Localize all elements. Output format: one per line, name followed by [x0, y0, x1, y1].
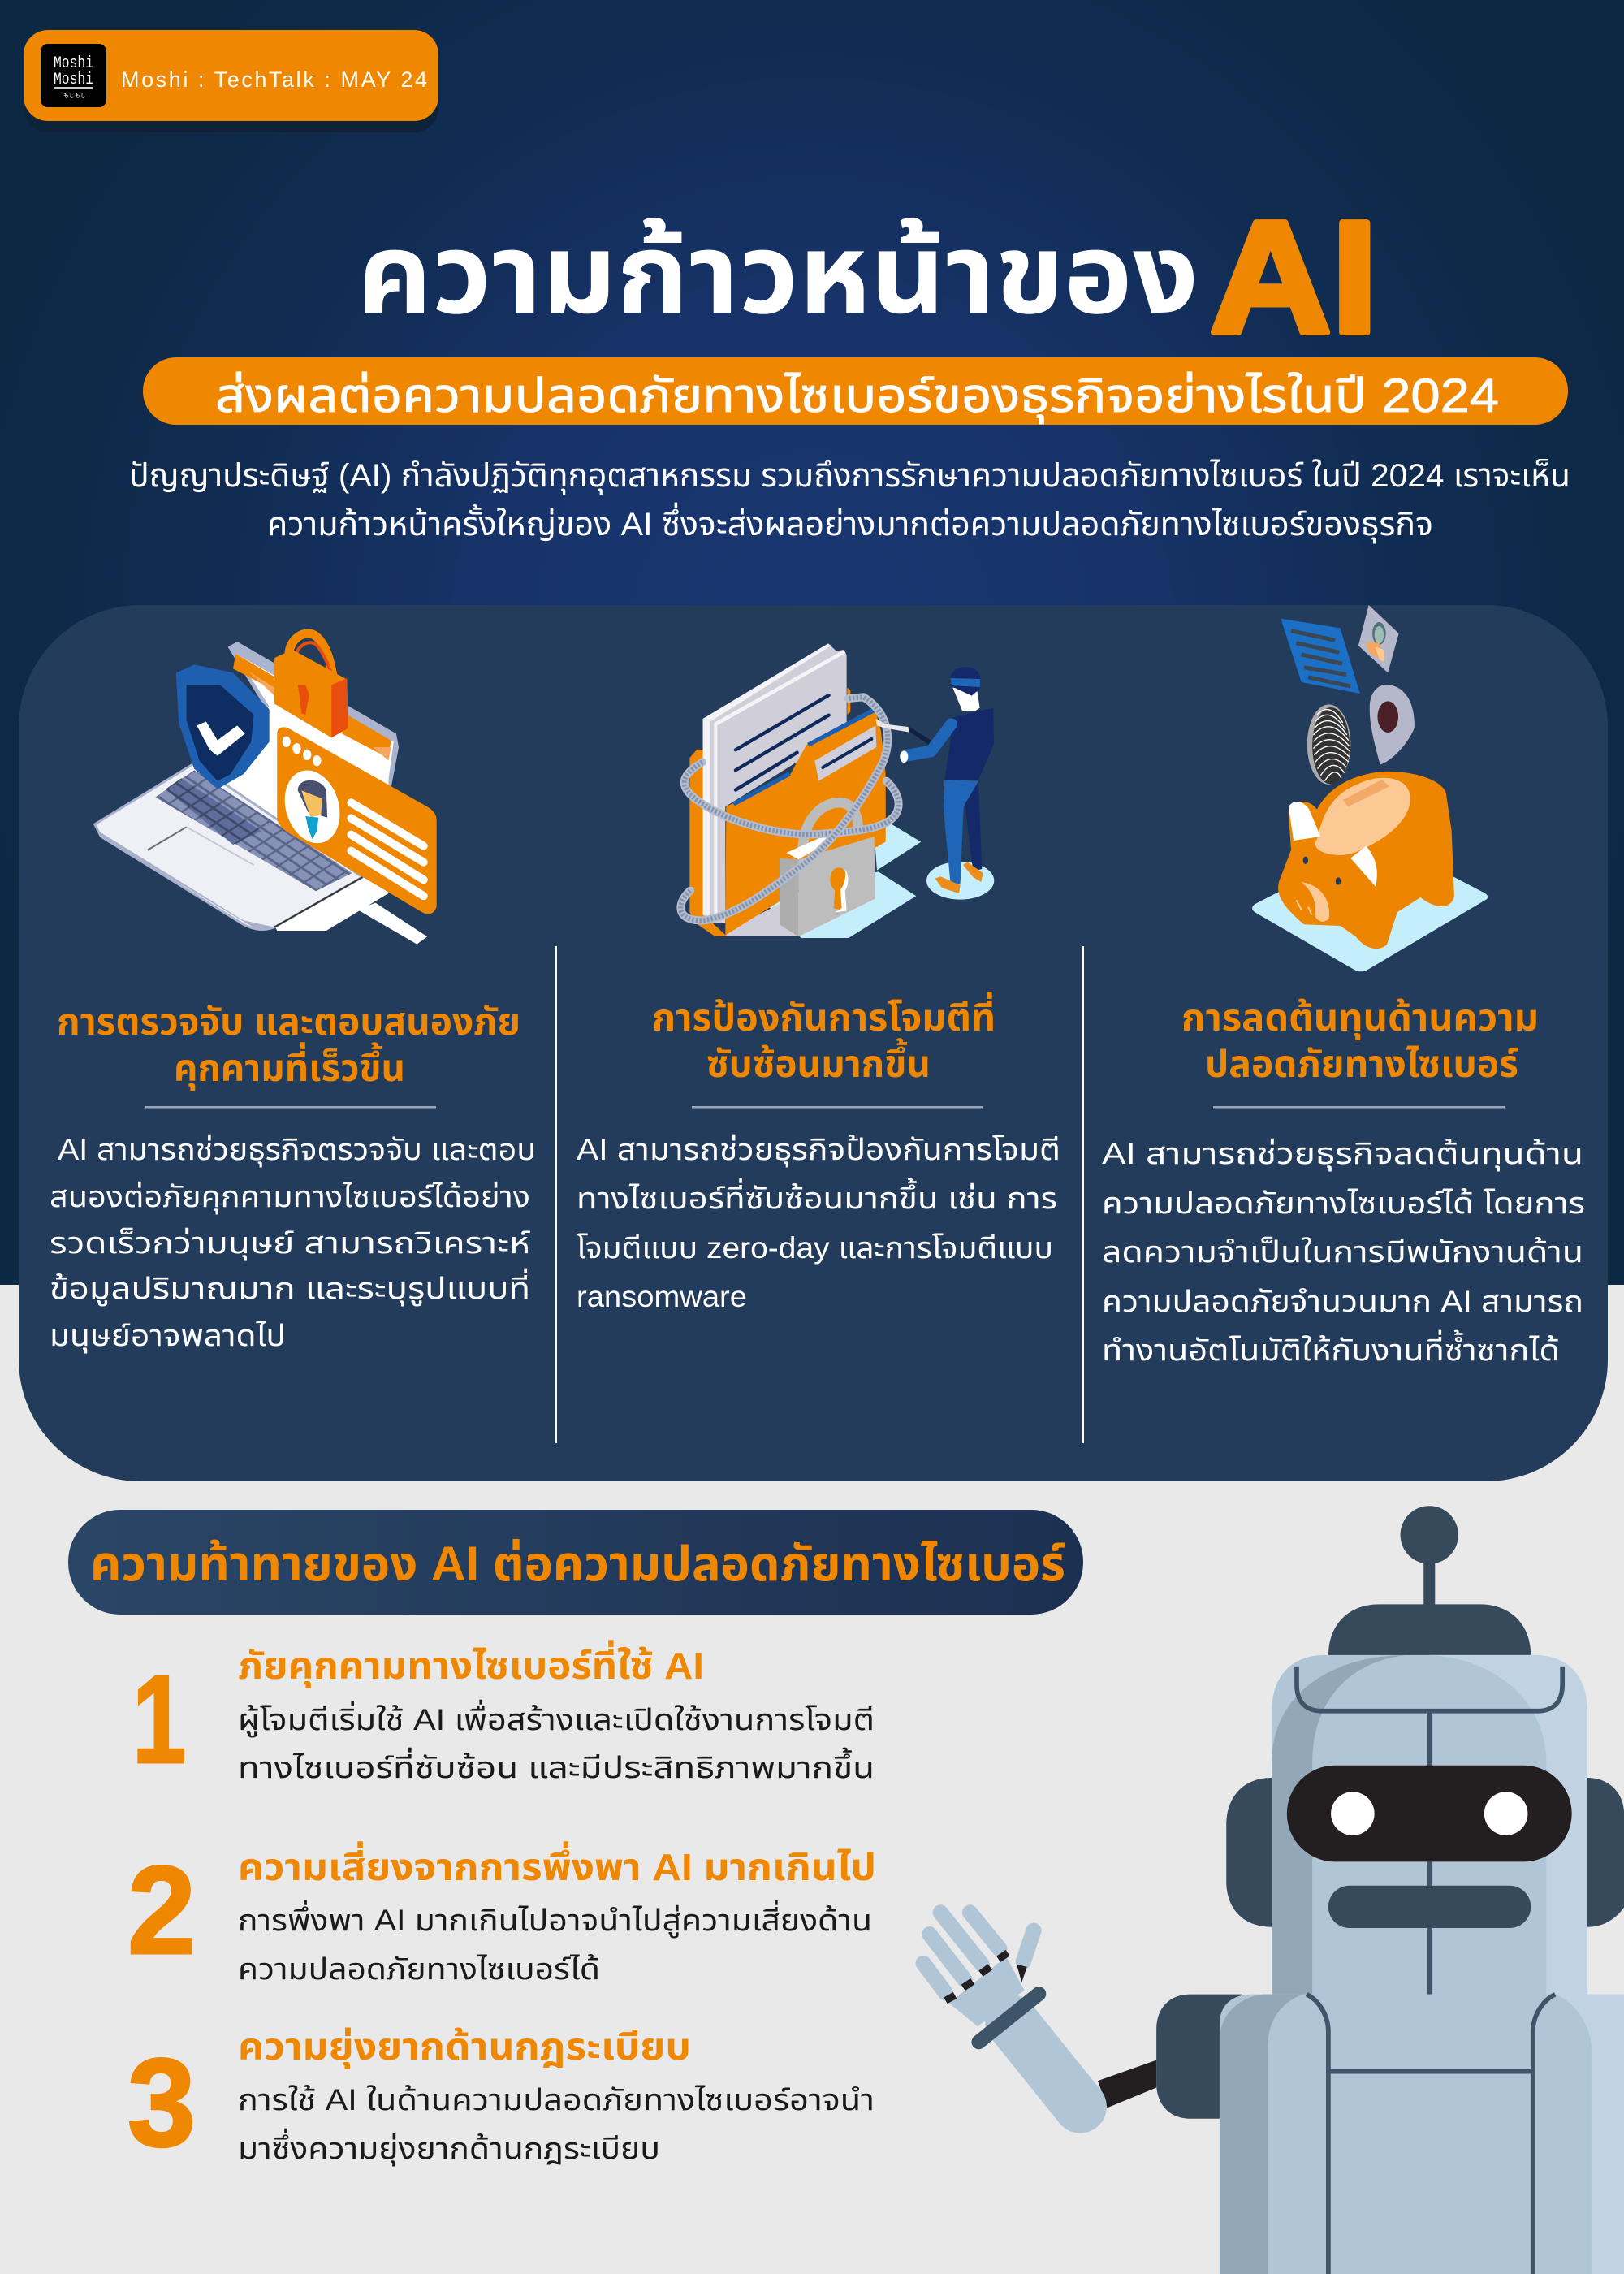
- column 3 body: ทำงานอัตโนมัติให้กับงานที่ซ้ำซากได้: [1102, 1329, 1560, 1367]
- column 3 heading: การลดต้นทุนด้านความ: [1181, 996, 1539, 1040]
- challenge 3 text: [238, 2083, 875, 2167]
- fingerprint: [1307, 704, 1350, 785]
- column 3 heading: ปลอดภัยทางไซเบอร์: [1205, 1043, 1518, 1085]
- number 1: 1: [132, 1649, 186, 1789]
- column 1: detection and response: [50, 1001, 536, 1354]
- column 2 heading: ซับซ้อนมากขึ้น: [706, 1038, 931, 1085]
- column 2 heading: [652, 992, 996, 1085]
- panel: three benefits: [19, 605, 1608, 1481]
- location pin: [1370, 685, 1415, 765]
- column 1 body: ข้อมูลปริมาณมาก และระบุรูปแบบที่: [50, 1268, 530, 1307]
- column 2 body: [577, 1133, 1060, 1313]
- column 2 body: ทางไซเบอร์ที่ซับซ้อนมากขึ้น เช่น การ: [577, 1178, 1057, 1215]
- subtitle pill: [143, 357, 1568, 425]
- badge text: Moshi : TechTalk : MAY 24: [121, 67, 427, 92]
- challenge 3 text: การใช้ AI ในด้านความปลอดภัยทางไซเบอร์อาจนำ: [238, 2083, 875, 2116]
- column 1 body: AI สามารถช่วยธุรกิจตรวจจับ และตอบ: [58, 1133, 536, 1168]
- column 3 body: [1102, 1137, 1585, 1367]
- papers: [703, 643, 847, 923]
- ID photo: [1358, 605, 1399, 672]
- robot head: [1272, 1655, 1587, 1995]
- column 3: reducing cost: [1102, 996, 1585, 1367]
- illustration: locked folder and hacker: [680, 643, 994, 938]
- column 1 heading: คุกคามที่เร็วขึ้น: [174, 1042, 405, 1091]
- column 2 heading: การป้องกันการโจมตีที่: [652, 992, 996, 1039]
- challenge 1 text: [238, 1699, 875, 1784]
- icon: Moshi Moshi logo: Moshi: [54, 71, 93, 89]
- icon: Moshi Moshi logo: [41, 44, 106, 107]
- column 1 heading: การตรวจจับ และตอบสนองภัย: [57, 1001, 520, 1043]
- challenge 2 text: [238, 1900, 872, 1986]
- title: AI: [1210, 188, 1378, 366]
- chain: [680, 697, 899, 920]
- robot body: [1220, 1995, 1624, 2274]
- title: [357, 188, 1378, 366]
- column 3 body: ความปลอดภัยทางไซเบอร์ได้ โดยการ: [1102, 1187, 1585, 1220]
- column 1 body: สนองต่อภัยคุกคามทางไซเบอร์ได้อย่าง: [50, 1180, 530, 1215]
- padlock: [802, 802, 858, 855]
- keyboard keys: [155, 770, 352, 891]
- robot forearm and hand: [923, 1913, 1080, 2107]
- challenge 1 text: ผู้โจมตีเริ่มใช้ AI เพื่อสร้างและเปิดใช้งานการโจมตี: [238, 1699, 875, 1738]
- column 1 heading: [57, 1001, 520, 1091]
- challenge 3 heading: ความยุ่งยากด้านกฎระเบียบ: [238, 2025, 691, 2069]
- illustration: piggy bank with personal data: [1252, 605, 1488, 971]
- ID card: [277, 727, 437, 914]
- column 1 body: รวดเร็วกว่ามนุษย์ สามารถวิเคราะห์: [50, 1226, 530, 1261]
- subtitle pill: ส่งผลต่อความปลอดภัยทางไซเบอร์ของธุรกิจอย่างไรในปี 2024: [215, 370, 1499, 424]
- number 3: 3: [127, 2033, 196, 2172]
- column 3 body: ความปลอดภัยจำนวนมาก AI สามารถ: [1102, 1285, 1583, 1318]
- number 2: 2: [127, 1840, 196, 1980]
- challenge 2 text: ความปลอดภัยทางไซเบอร์ได้: [238, 1952, 600, 1986]
- column 2 body: โจมตีแบบ zero-day และการโจมตีแบบ: [577, 1231, 1053, 1265]
- robot cap: [1328, 1604, 1531, 1656]
- challenge 2 heading: ความเสี่ยงจากการพึ่งพา AI มากเกินไป: [238, 1841, 876, 1888]
- folder front: [725, 711, 886, 936]
- column 3 body: AI สามารถช่วยธุรกิจลดต้นทุนด้าน: [1102, 1137, 1583, 1172]
- folder back: [689, 750, 727, 936]
- padlock: [289, 633, 334, 682]
- section heading pill: challenges: ความท้าทายของ AI ต่อความปลอดภัยทางไซเบอร์: [90, 1537, 1065, 1591]
- intro text: [129, 458, 1570, 543]
- challenge 1 text: ทางไซเบอร์ที่ซับซ้อน และมีประสิทธิภาพมากขึ้น: [238, 1747, 875, 1784]
- column 3 heading: [1181, 996, 1539, 1085]
- intro text: ปัญญาประดิษฐ์ (AI) กำลังปฏิวัติทุกอุตสาหกรรม รวมถึงการรักษาความปลอดภัยทางไซเบอร์ ในปี 2024 เราจะเห็น: [129, 458, 1570, 495]
- challenge 2 text: การพึ่งพา AI มากเกินไปอาจนำไปสู่ความเสี่ยงด้าน: [238, 1900, 872, 1939]
- illustration: laptop with shield, padlock and ID card: [95, 633, 437, 945]
- column 1 body: มนุษย์อาจพลาดไป: [50, 1319, 286, 1354]
- challenge 3: [127, 2025, 875, 2172]
- robot antenna: [1401, 1506, 1458, 1607]
- column 2 body: ransomware: [577, 1280, 747, 1313]
- title: ความก้าวหน้าของ: [357, 212, 1199, 337]
- background: light grey lower area: [0, 1285, 1624, 2274]
- illustration: waving robot: [923, 1506, 1624, 2274]
- icon: Moshi Moshi logo: もしもし: [63, 93, 86, 99]
- challenge 2: [127, 1840, 876, 1986]
- challenge 1: [132, 1640, 875, 1789]
- section heading pill: challenges: [68, 1510, 1083, 1615]
- background: dark navy upper area: [0, 0, 1624, 1285]
- robot ears: [1226, 1778, 1624, 1927]
- badge: Moshi TechTalk May 24: [24, 30, 438, 132]
- column 1 body: [50, 1133, 536, 1354]
- document: [1281, 619, 1360, 694]
- robot shoulder and arm link: [1098, 1995, 1242, 2119]
- pig: [1278, 772, 1454, 949]
- challenge 1 heading: ภัยคุกคามทางไซเบอร์ที่ใช้ AI: [238, 1640, 704, 1688]
- challenge 3 text: มาซึ่งความยุ่งยากด้านกฎระเบียบ: [238, 2128, 660, 2167]
- column 3 body: ลดความจำเป็นในการมีพนักงานด้าน: [1102, 1235, 1583, 1269]
- intro text: ความก้าวหน้าครั้งใหญ่ของ AI ซึ่งจะส่งผลอย่างมากต่อความปลอดภัยทางไซเบอร์ของธุรกิจ: [267, 502, 1433, 543]
- icon: Moshi Moshi logo: Moshi: [54, 54, 93, 73]
- hacker figure: [907, 727, 931, 745]
- column 2: preventing complex attacks: [577, 992, 1060, 1313]
- column 2 body: AI สามารถช่วยธุรกิจป้องกันการโจมตี: [577, 1133, 1060, 1168]
- shield: [176, 664, 270, 789]
